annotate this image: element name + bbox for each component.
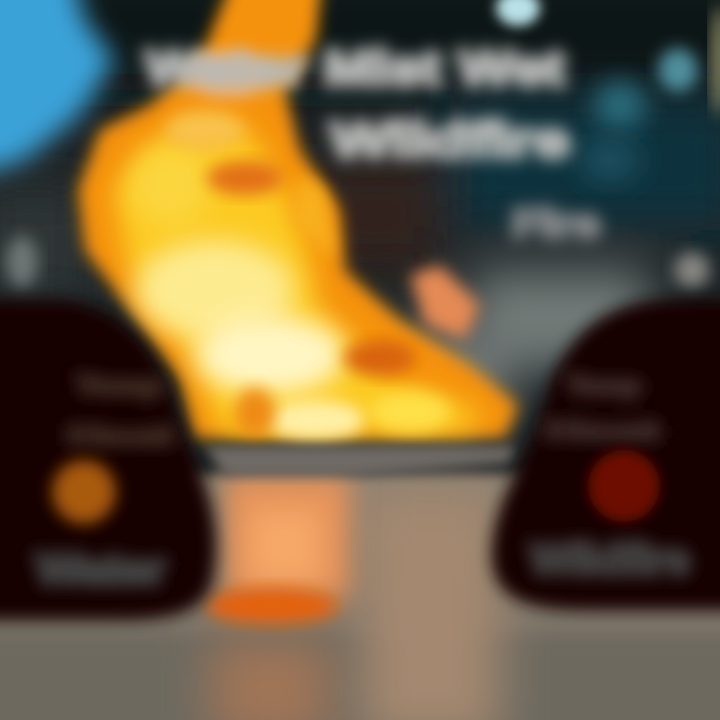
right card body: [492, 300, 720, 610]
right card text lines: Temp: [566, 370, 642, 400]
icon: red circle: [588, 450, 660, 522]
title: [145, 40, 600, 246]
card: right panel: [492, 300, 720, 610]
card: left panel: [0, 300, 216, 620]
left card caption: Water: [36, 545, 166, 594]
left card text lines: Temp: [75, 370, 163, 400]
background: blue light at left: [0, 0, 115, 180]
right card text lines: [546, 370, 659, 445]
fire flames: [78, 0, 518, 440]
title: Water Mist Wet: [145, 40, 565, 96]
background: teal lights at right: [6, 0, 720, 288]
title: Fire: [512, 202, 600, 246]
icon: orange flame: [52, 460, 116, 524]
title: Wildfire: [330, 112, 570, 168]
right card text lines: Heat: [546, 415, 659, 445]
left card text lines: [68, 370, 173, 450]
left card text lines: Heat: [68, 420, 173, 450]
glass of orange liquid: [206, 475, 350, 624]
left card body: [0, 300, 216, 620]
right card caption: Wildfire: [530, 535, 690, 584]
metal tray rim under fire: [205, 446, 515, 476]
floor: [0, 475, 720, 720]
